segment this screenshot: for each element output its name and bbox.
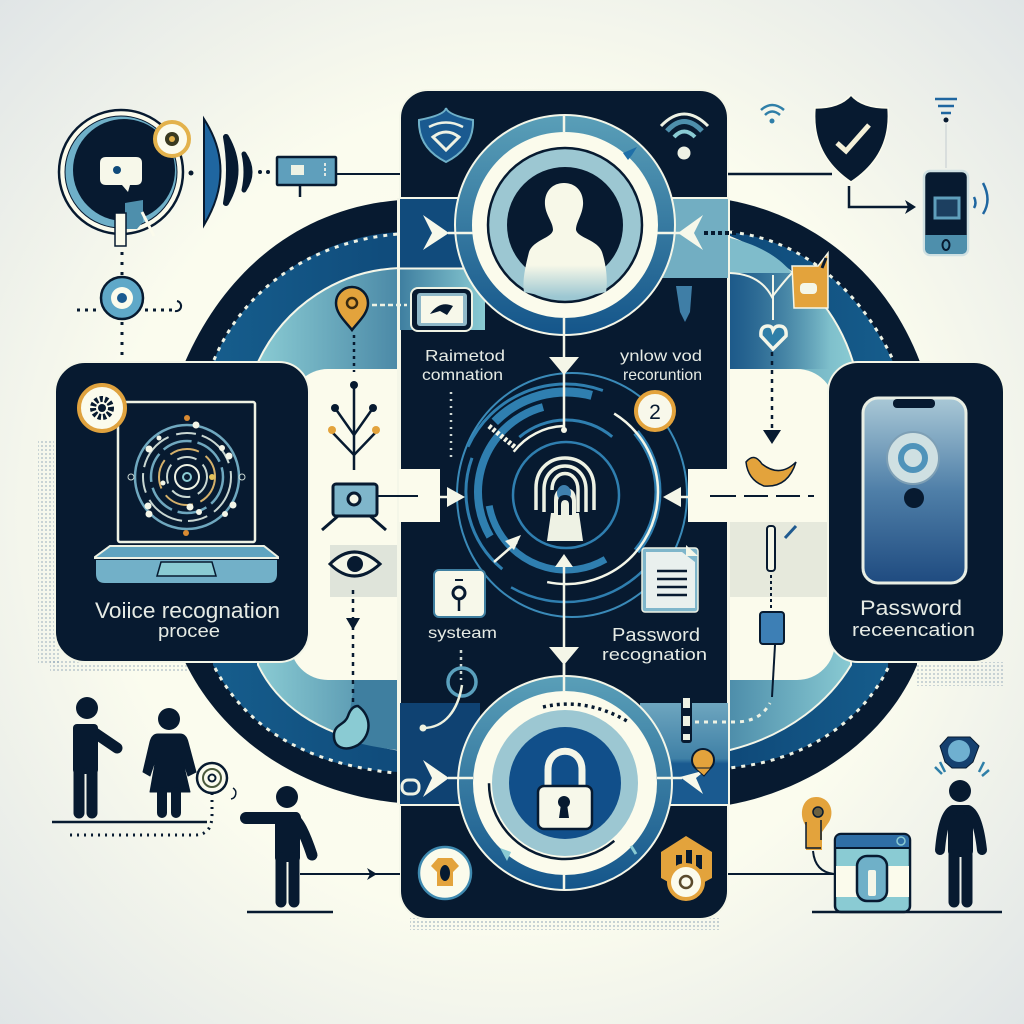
right panel: password: Password (860, 597, 962, 620)
people left group (52, 697, 236, 835)
icon: bird (746, 457, 796, 486)
icon: fingerprint (536, 458, 594, 512)
document icon and password recognition label (602, 545, 707, 664)
icon: laptop (95, 402, 278, 583)
arrows around scanner (440, 487, 690, 507)
panel labels: top: recoruntion (623, 367, 702, 384)
arrows into profile circle (423, 215, 703, 250)
panel labels: top: comnation (422, 367, 503, 384)
bottom panel icons (419, 694, 770, 899)
left target node (77, 252, 181, 355)
left connector icons (322, 287, 418, 748)
vertical arrow bottom (549, 554, 579, 678)
icon: heart (761, 326, 786, 349)
icon: plug cable (767, 526, 775, 571)
icon: wifi in panel (661, 114, 708, 160)
user profile circle (448, 115, 682, 335)
icon: padlock (548, 751, 582, 790)
icon: orange tag (792, 253, 828, 308)
person pointing (246, 786, 400, 912)
panel labels: top: ynlow vod (620, 348, 702, 365)
icon: shield in panel (419, 108, 473, 162)
system label with icon (420, 570, 497, 732)
icon: shield check (815, 95, 888, 182)
icon: cog (940, 737, 979, 768)
icon: camera node (333, 484, 377, 516)
right panel: password: receencation (852, 620, 975, 640)
padlock circle (448, 664, 682, 890)
icon: small phone (924, 171, 968, 255)
top-right security group (728, 95, 988, 255)
document icon and password recognition label: Password (612, 625, 700, 645)
icon: spiral target (197, 763, 227, 793)
icon: orange pin (336, 287, 368, 330)
central panel (399, 90, 730, 919)
icon: tree network (332, 385, 376, 470)
step number badge: 2 (649, 401, 661, 424)
icon: eye (330, 552, 380, 576)
icon: hook drop (334, 706, 368, 748)
icon: phone (863, 398, 966, 583)
icon: person silhouette (523, 183, 607, 297)
step number badge (636, 392, 674, 430)
arrows into padlock circle (402, 760, 706, 797)
icon: orange key (802, 797, 831, 850)
icon: window lock (835, 834, 910, 912)
ring diagram (185, 198, 920, 805)
left panel: voice recognition (55, 362, 309, 662)
person standing right (935, 737, 989, 902)
fingerprint scanner (411, 337, 721, 647)
document icon and password recognition label: recognation (602, 645, 707, 664)
left panel: voice recognition: procee (158, 621, 220, 641)
left panel: voice recognition: Voiice recognation (95, 598, 280, 623)
icon: badge (79, 385, 125, 431)
ticks (448, 116, 682, 335)
ticks (448, 664, 682, 890)
side notches (399, 469, 440, 522)
right panel: password (828, 362, 1004, 662)
top-left voice device group (59, 110, 400, 246)
panel labels: top: Raimetod (425, 348, 505, 365)
halftone shadows (38, 440, 1005, 930)
right connector icons (712, 253, 828, 697)
dashed ring path (214, 232, 893, 775)
bottom right group (728, 797, 1002, 912)
system label with icon: systeam (428, 625, 497, 642)
panel labels: top (411, 286, 702, 460)
vertical arrow top (549, 335, 579, 433)
dots right of arrow (704, 231, 738, 235)
